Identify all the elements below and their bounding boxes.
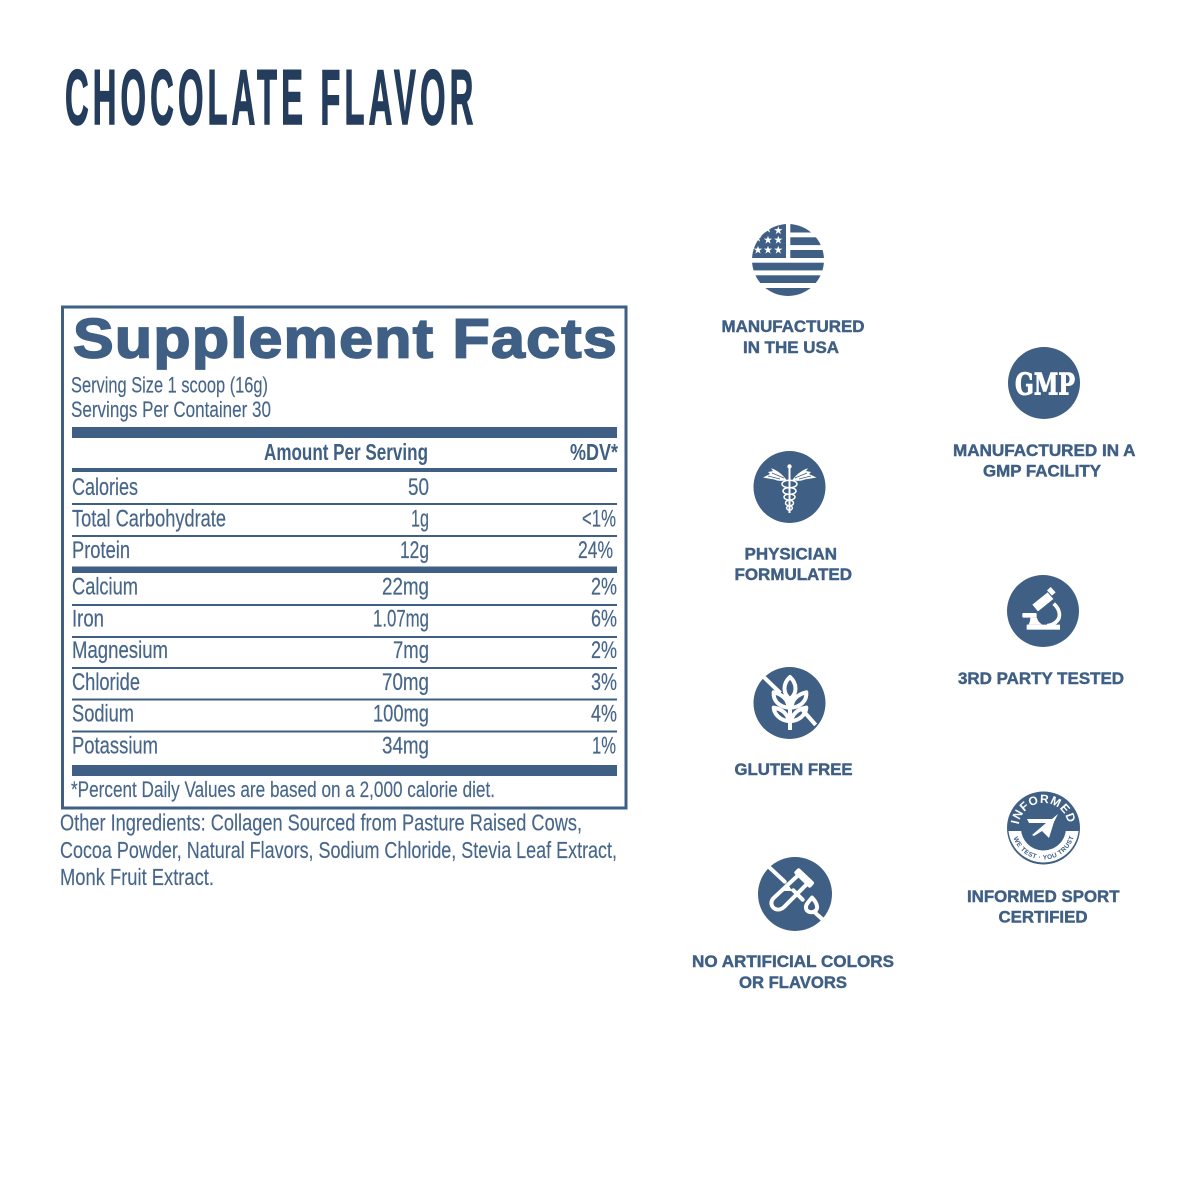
label: manufactured in the usa: [722, 317, 864, 357]
row: sodium: 4%: [591, 700, 617, 728]
row: sodium: 100mg: [373, 700, 429, 728]
icon: caduceus: [754, 451, 826, 523]
table rules: [72, 427, 617, 776]
panel heading: Supplement Facts: [73, 306, 618, 370]
row: calcium: [72, 574, 617, 600]
icon: gmp badge: GMP: [1015, 368, 1075, 402]
row: magnesium: Magnesium: [72, 637, 168, 664]
row: calcium: 22mg: [382, 574, 429, 600]
row: protein: [72, 537, 613, 564]
icon: microscope: [1007, 575, 1079, 647]
row: protein: 12g: [400, 537, 429, 564]
row: calcium: 2%: [591, 574, 617, 600]
icon: informed sport badge: WE TEST · YOU TRUST: [1014, 836, 1074, 860]
icon: gmp badge: [1008, 347, 1080, 419]
row: magnesium: 2%: [591, 637, 617, 664]
other ingredients: Monk Fruit Extract.: [60, 864, 214, 890]
panel: supplement facts: [62, 306, 626, 808]
row: potassium: Potassium: [72, 732, 158, 760]
label: physician formulated: PHYSICIAN: [744, 544, 837, 564]
row: chloride: 70mg: [382, 669, 429, 696]
table header: Amount Per Serving: [264, 439, 428, 465]
row: calories: [72, 474, 429, 501]
row: protein: Protein: [72, 537, 130, 564]
icon: gluten free: [754, 667, 826, 739]
row: total carbohydrate: [72, 506, 616, 532]
label: manufactured in the usa: IN THE USA: [743, 338, 839, 357]
label: no artificial colors or flavors: NO ARTIFICIAL COLORS: [692, 952, 894, 971]
label: manufactured in a gmp facility: GMP FACILITY: [983, 462, 1101, 480]
row: potassium: [72, 732, 616, 760]
label: no artificial colors or flavors: [692, 952, 894, 992]
label: manufactured in a gmp facility: [953, 441, 1136, 480]
infographic canvas: [60, 68, 1136, 988]
label: informed sport certified: [967, 887, 1120, 926]
row: magnesium: 7mg: [393, 637, 429, 664]
row: total carbohydrate: <1%: [582, 506, 616, 532]
label: informed sport certified: CERTIFIED: [998, 908, 1088, 926]
title: CHOCOLATE FLAVOR: [65, 54, 473, 141]
panel border: [62, 307, 626, 808]
label: manufactured in a gmp facility: MANUFACTURED IN A: [953, 441, 1136, 460]
label: physician formulated: FORMULATED: [734, 565, 852, 584]
serving information: [71, 372, 271, 422]
icon: informed sport badge: [1007, 792, 1080, 864]
label: informed sport certified: INFORMED SPORT: [967, 887, 1120, 906]
row: sodium: [72, 700, 617, 728]
footnote: *Percent Daily Values are based on a 2,000 calorie diet.: [71, 777, 495, 802]
row: calcium: Calcium: [72, 574, 138, 600]
row: iron: 1.07mg: [373, 606, 429, 632]
row: total carbohydrate: Total Carbohydrate: [72, 506, 226, 532]
row: chloride: [72, 669, 617, 696]
row: potassium: 34mg: [382, 732, 429, 760]
table header: [264, 439, 618, 465]
row: chloride: Chloride: [72, 669, 140, 696]
row: total carbohydrate: 1g: [411, 506, 429, 532]
other ingredients: [60, 810, 617, 890]
label: 3rd party tested: 3RD PARTY TESTED: [958, 669, 1124, 688]
other ingredients: Other Ingredients: Collagen Sourced from Pasture Raised Cows,: [60, 810, 582, 836]
icon: no artificial colors: [758, 857, 832, 931]
row: iron: 6%: [591, 606, 617, 632]
row: iron: [72, 606, 617, 632]
row: potassium: 1%: [592, 732, 616, 760]
other ingredients: Cocoa Powder, Natural Flavors, Sodium Chloride, Stevia Leaf Extract,: [60, 837, 617, 863]
label: manufactured in the usa: MANUFACTURED: [722, 317, 864, 336]
row: calories: 50: [408, 474, 429, 501]
row: iron: Iron: [72, 606, 104, 632]
table header: %DV*: [570, 439, 618, 465]
label: physician formulated: [734, 544, 852, 584]
row: calories: Calories: [72, 474, 138, 501]
row: protein: 24%: [578, 537, 613, 564]
icon: informed sport badge: INFORMED: [1010, 794, 1075, 824]
label: no artificial colors or flavors: OR FLAVORS: [739, 973, 847, 992]
row: magnesium: [72, 637, 617, 664]
serving information: Servings Per Container 30: [71, 397, 271, 422]
serving information: Serving Size 1 scoop (16g): [71, 372, 268, 398]
row: chloride: 3%: [591, 669, 617, 696]
icon: american flag: [750, 224, 826, 296]
row: sodium: Sodium: [72, 700, 134, 728]
label: gluten free: GLUTEN FREE: [734, 760, 852, 779]
